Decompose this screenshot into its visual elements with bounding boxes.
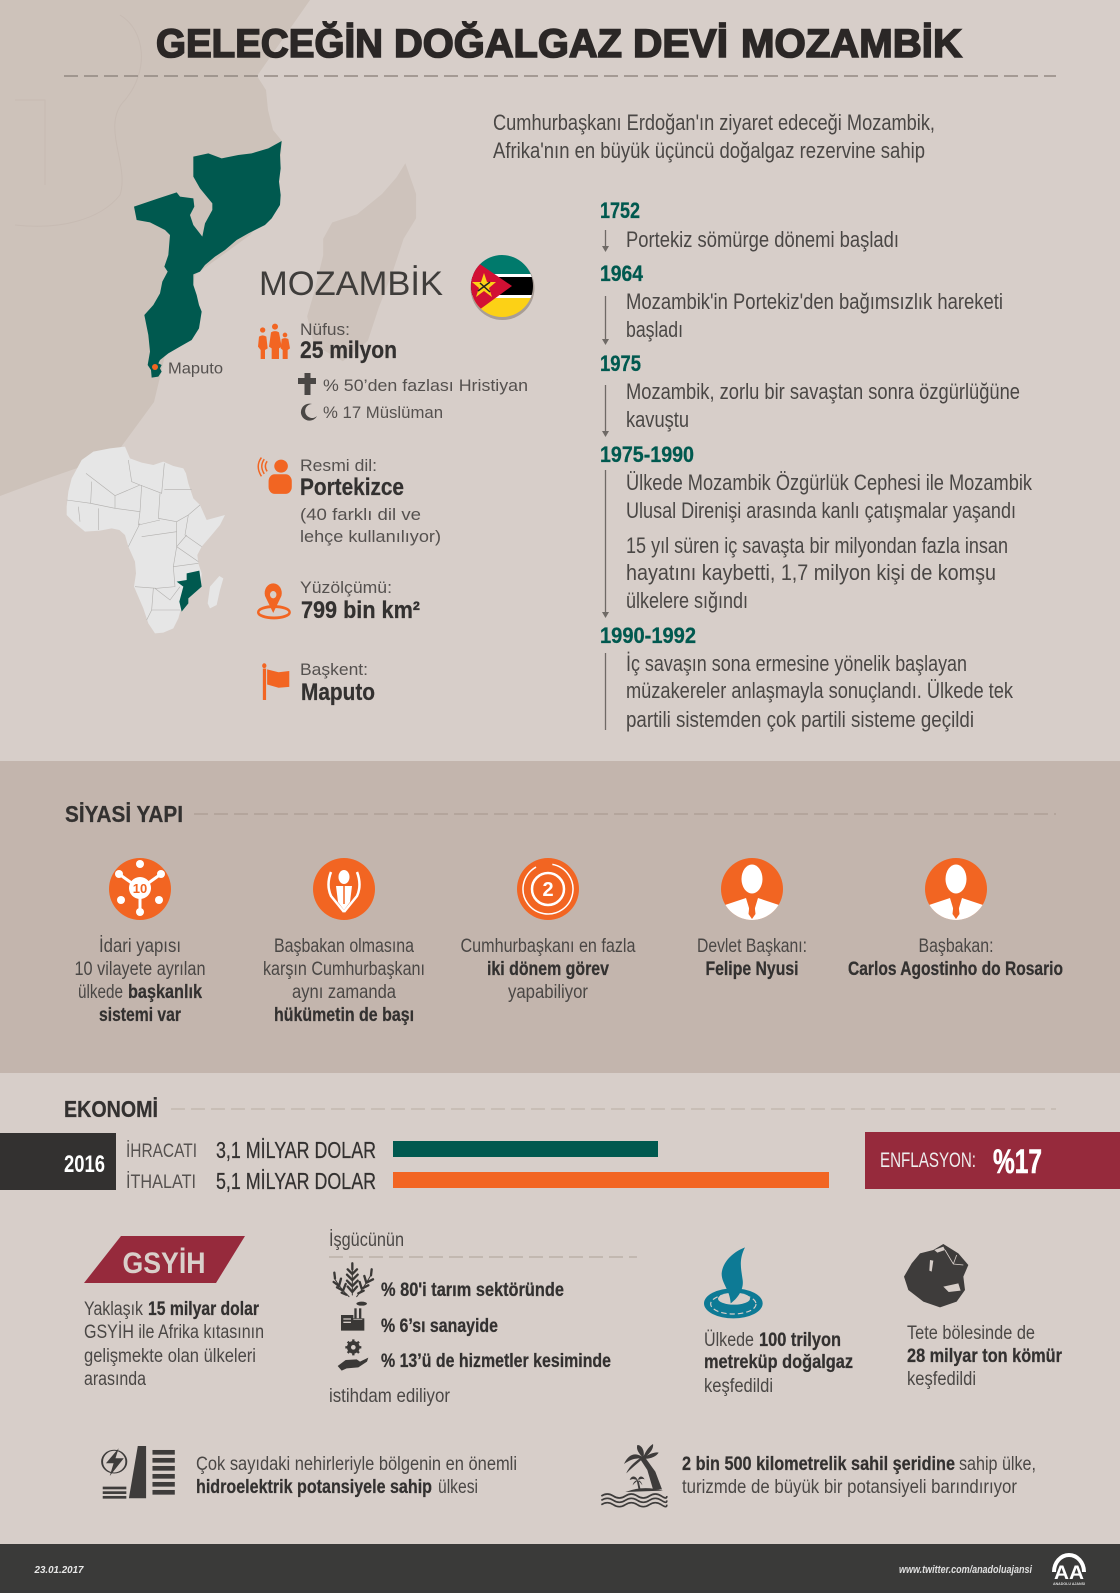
- timeline: 1990-1992: müzakereler anlaşmayla sonuçlandı. Ülkede tek: [626, 678, 1014, 703]
- item: provinces: 10: [133, 881, 147, 896]
- stat: official language: [258, 456, 441, 546]
- title: MOZAMBİK: [741, 22, 962, 66]
- callout: inflation: [865, 1132, 1120, 1189]
- icon: crescent: [301, 404, 317, 421]
- icon: gas flame: [704, 1247, 763, 1318]
- intro text: Cumhurbaşkanı Erdoğan'ın ziyaret edeceği Mozambik,: [493, 110, 935, 135]
- item: provinces: başkanlık: [128, 982, 202, 1003]
- icon: palm island: [601, 1444, 667, 1507]
- item: two terms: 2: [542, 879, 554, 901]
- trade bar chart: [0, 1133, 829, 1194]
- icon: cross: [298, 373, 316, 395]
- timeline: [600, 198, 1033, 732]
- stat: capital: [262, 660, 375, 706]
- timeline: 1975-1990: Ülkede Mozambik Özgürlük Cephesi ile Mozambik: [626, 470, 1033, 495]
- block: natural gas: [704, 1247, 853, 1397]
- stat: official language: (40 farklı dil ve: [300, 505, 421, 524]
- stat: religion: % 17 Müslüman: [323, 403, 443, 422]
- block: coal: [904, 1244, 1063, 1390]
- timeline: 1975: [600, 351, 1020, 437]
- stat: population: 25 milyon: [300, 337, 397, 364]
- block: hydroelectric: ülkesi: [438, 1477, 478, 1498]
- stat: religion: % 50’den fazlası Hristiyan: [323, 376, 528, 395]
- icon: coal lump: [904, 1244, 968, 1307]
- timeline: 1990-1992: [600, 623, 1014, 732]
- timeline: 1964: Mozambik'in Portekiz'den bağımsızlık hareketi: [626, 289, 1003, 314]
- intro text: [493, 110, 935, 163]
- heading: Siyasi Yapı: SİYASİ YAPI: [65, 801, 183, 827]
- timeline: 1975-1990: 1975-1990: [600, 442, 694, 467]
- timeline: 1752: Portekiz sömürge dönemi başladı: [626, 227, 899, 252]
- footer: 23.01.2017: [34, 1564, 85, 1576]
- icon: speaker: [258, 458, 292, 494]
- stat: official language: Portekizce: [300, 474, 404, 501]
- icon: wheat: [334, 1263, 373, 1297]
- timeline: 1964: başladı: [626, 317, 683, 342]
- block: workforce: % 80'i tarım sektöründe: [381, 1280, 564, 1301]
- timeline: 1990-1992: partili sistemden çok partili sisteme geçildi: [626, 707, 974, 732]
- timeline: 1752: [600, 198, 899, 252]
- trade bar chart: İHRACATI: [126, 1141, 197, 1162]
- item: two terms: [460, 858, 636, 1003]
- stat: area: 799 bin km²: [301, 597, 420, 624]
- item: provinces: sistemi var: [99, 1005, 181, 1026]
- icon: Mozambique flag: [468, 254, 534, 320]
- title: DEVİ: [633, 22, 728, 66]
- stat: official language: lehçe kullanılıyor): [300, 527, 441, 546]
- stat: population: Nüfus:: [300, 320, 350, 339]
- block: workforce: [329, 1230, 637, 1407]
- item: prime minister: [848, 858, 1063, 980]
- icon: dam and lightning: [102, 1446, 175, 1499]
- block: hydroelectric: hidroelektrik potansiyele sahip: [196, 1477, 432, 1498]
- stat: area: Yüzölçümü:: [300, 578, 392, 597]
- item: prime minister: Başbakan:: [918, 936, 994, 957]
- stat: capital: Maputo: [301, 679, 375, 706]
- block: coastline: sahip ülke,: [959, 1454, 1036, 1475]
- block: natural gas: 100 trilyon: [759, 1330, 841, 1351]
- timeline: 1975-1990: Ulusal Direnişi arasında kanlı çatışmalar yaşandı: [626, 498, 1016, 523]
- item: provinces: [74, 858, 206, 1026]
- icon: factory: [341, 1302, 367, 1331]
- stat: religion: [298, 373, 528, 422]
- map: Mozambique with Maputo: Maputo: [168, 360, 223, 378]
- block: coastline: 2 bin 500 kilometrelik sahil şeridine: [682, 1454, 955, 1475]
- block: GDP: GSYİH: [122, 1247, 206, 1280]
- footer: [0, 1544, 1120, 1593]
- item: president heads government: Başbakan olmasına: [274, 936, 414, 957]
- block: natural gas: keşfedildi: [704, 1376, 773, 1397]
- timeline: 1975-1990: ülkelere sığındı: [626, 588, 748, 613]
- block: coastline: turizmde de büyük bir potansiyeli barındırıyor: [682, 1477, 1018, 1498]
- timeline: 1990-1992: İç savaşın sona ermesine yönelik başlayan: [626, 651, 967, 676]
- block: natural gas: metreküp doğalgaz: [704, 1352, 853, 1373]
- trade bar chart: 2016: [64, 1151, 105, 1178]
- timeline: 1752: 1752: [600, 198, 640, 223]
- block: coal: Tete bölesinde de: [907, 1323, 1035, 1344]
- timeline: 1975-1990: hayatını kaybetti, 1,7 milyon kişi de komşu: [626, 560, 996, 585]
- timeline: 1964: 1964: [600, 261, 644, 286]
- block: GDP: Yaklaşık: [84, 1299, 143, 1320]
- icon: people: [258, 324, 290, 359]
- item: head of state: Felipe Nyusi: [706, 959, 798, 980]
- item: president heads government: [263, 858, 425, 1026]
- title: GELECEĞİN: [156, 20, 383, 66]
- icon: Anadolu Agency logo: [1053, 1555, 1085, 1586]
- block: GDP: GSYİH ile Afrika kıtasının: [84, 1322, 264, 1343]
- block: coal: 28 milyar ton kömür: [907, 1346, 1063, 1367]
- intro text: Afrika'nın en büyük üçüncü doğalgaz rezervine sahip: [493, 138, 925, 163]
- item: head of state: Devlet Başkanı:: [697, 936, 807, 957]
- stat: official language: Resmi dil:: [300, 456, 377, 475]
- icon: flag: [262, 663, 289, 700]
- map background: Madagascar: [307, 163, 416, 361]
- block: coastline: [601, 1444, 1036, 1507]
- timeline: 1990-1992: 1990-1992: [600, 623, 696, 648]
- block: hydroelectric: [102, 1446, 517, 1499]
- item: provinces: ülkede: [78, 982, 123, 1003]
- item: provinces: 10 vilayete ayrılan: [74, 959, 206, 980]
- stat: area: [258, 578, 420, 624]
- block: workforce: % 6’sı sanayide: [381, 1316, 498, 1337]
- block: GDP: [84, 1236, 264, 1390]
- callout: inflation: ENFLASYON:: [880, 1149, 976, 1172]
- panel: political structure: [0, 761, 1120, 1073]
- heading: Ekonomi: EKONOMİ: [64, 1096, 158, 1122]
- icon: Anadolu Agency logo: AA: [1054, 1563, 1084, 1584]
- trade bar chart: İTHALATI: [126, 1172, 196, 1193]
- stat: capital: Başkent:: [300, 660, 368, 679]
- block: GDP: arasında: [84, 1369, 146, 1390]
- block: GDP: gelişmekte olan ülkeleri: [84, 1346, 256, 1367]
- locator map: Africa: [67, 447, 225, 633]
- title: DOĞALGAZ: [394, 20, 622, 66]
- footer: www.twitter.com/anadoluajansi: [899, 1564, 1033, 1576]
- stat: population: [258, 320, 397, 364]
- icon: location pin: [258, 583, 290, 618]
- trade bar chart: 5,1 MİLYAR DOLAR: [216, 1168, 376, 1194]
- item: president heads government: karşın Cumhurbaşkanı: [263, 959, 425, 980]
- block: workforce: % 13’ü de hizmetler kesiminde: [381, 1351, 611, 1372]
- item: two terms: iki dönem görev: [487, 959, 609, 980]
- map: Mozambique with Maputo: [134, 141, 282, 378]
- item: provinces: İdari yapısı: [99, 936, 181, 957]
- trade bar chart: 3,1 MİLYAR DOLAR: [216, 1137, 376, 1163]
- icon: hand with gear: [338, 1339, 368, 1371]
- timeline: 1975: kavuştu: [626, 407, 689, 432]
- block: hydroelectric: Çok sayıdaki nehirleriyle bölgenin en önemli: [196, 1454, 517, 1475]
- icon: Anadolu Agency logo: ANADOLU AJANSI: [1053, 1582, 1085, 1586]
- block: GDP: 15 milyar dolar: [148, 1299, 259, 1320]
- item: head of state: [697, 858, 807, 980]
- timeline: 1964: [600, 261, 1003, 345]
- item: prime minister: Carlos Agostinho do Rosario: [848, 959, 1063, 980]
- block: natural gas: Ülkede: [704, 1330, 754, 1351]
- timeline: 1975-1990: [600, 442, 1033, 618]
- block: workforce: istihdam ediliyor: [329, 1386, 451, 1407]
- callout: inflation: %17: [993, 1143, 1042, 1181]
- block: workforce: İşgücünün: [329, 1230, 404, 1251]
- country name: MOZAMBİK: [259, 265, 443, 303]
- timeline: 1975-1990: 15 yıl süren iç savaşta bir milyondan fazla insan: [626, 533, 1008, 558]
- timeline: 1975: Mozambik, zorlu bir savaştan sonra özgürlüğüne: [626, 379, 1020, 404]
- item: two terms: yapabiliyor: [508, 982, 589, 1003]
- item: president heads government: hükümetin de başı: [274, 1005, 414, 1026]
- title: [156, 20, 962, 66]
- item: president heads government: aynı zamanda: [292, 982, 396, 1003]
- map background: African mainland: [0, 0, 310, 496]
- timeline: 1975: 1975: [600, 351, 641, 376]
- block: coal: keşfedildi: [907, 1369, 976, 1390]
- item: two terms: Cumhurbaşkanı en fazla: [460, 936, 636, 957]
